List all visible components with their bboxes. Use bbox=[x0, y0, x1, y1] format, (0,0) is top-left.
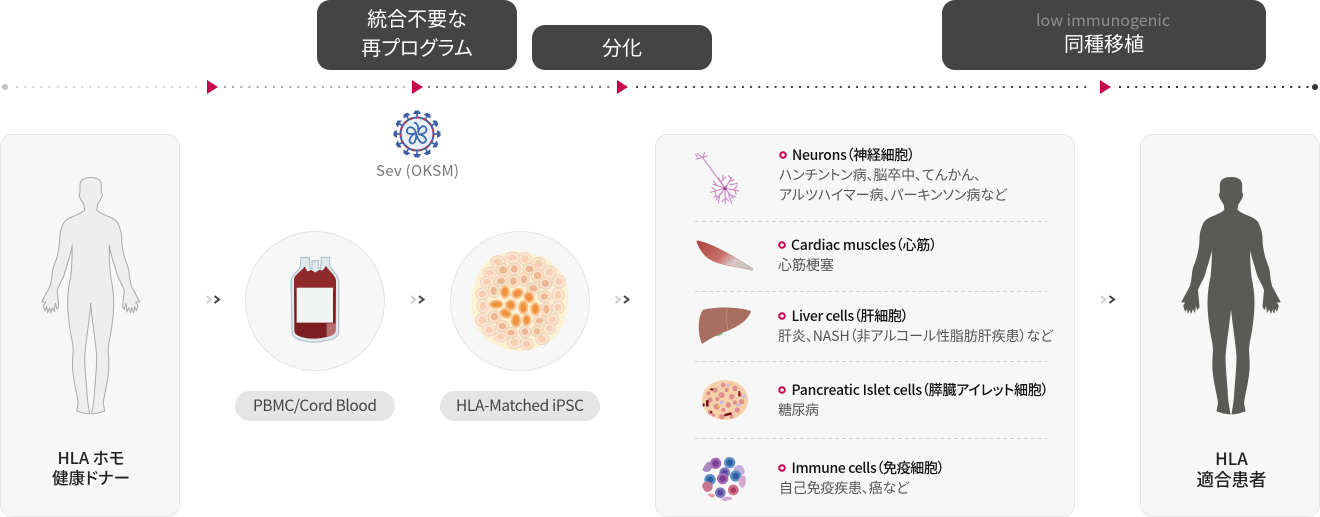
label: patient bbox=[1196, 445, 1266, 492]
box: reprogramming step: 統合不要な bbox=[367, 3, 467, 32]
bullet bbox=[780, 152, 786, 158]
icon: liver bbox=[699, 307, 751, 344]
box: allogeneic transplant step: 同種移植 bbox=[1064, 28, 1144, 57]
icon: patient body silhouette bbox=[1182, 178, 1280, 414]
box: reprogramming step: 再プログラム bbox=[361, 32, 473, 61]
text: neuron diseases: ハンチントン病、脳卒中、てんかん、 bbox=[779, 165, 981, 185]
icon: blood bag bbox=[291, 257, 339, 342]
arrow: cells to patient bbox=[1101, 296, 1114, 303]
label: patient: 適合患者 bbox=[1196, 467, 1266, 492]
bullet bbox=[779, 242, 785, 248]
icon: virus vector bbox=[394, 110, 440, 158]
arrow: blood to iPSC bbox=[411, 296, 424, 303]
bullet bbox=[779, 313, 785, 319]
row: cardiac muscles bbox=[697, 235, 937, 275]
pill: HLA-Matched iPSC bbox=[440, 391, 600, 421]
icon: muscle bbox=[697, 241, 753, 271]
arrow: donor to blood bbox=[206, 296, 219, 303]
circle: HLA-Matched iPSC bbox=[450, 232, 590, 370]
label: donor: HLA ホモ bbox=[57, 445, 125, 469]
text: neuron diseases: アルツハイマー病、パーキンソン病など bbox=[779, 185, 1008, 205]
box: differentiation step: 分化 bbox=[602, 32, 642, 61]
box: allogeneic transplant step: low immunogenic bbox=[1036, 7, 1170, 31]
row: immune cells bbox=[701, 457, 944, 501]
label: patient: HLA bbox=[1215, 445, 1248, 470]
timeline with arrow markers bbox=[2, 80, 1318, 94]
title: neurons: Neurons（神経細胞） bbox=[792, 145, 915, 165]
text: pancreatic diseases: 糖尿病 bbox=[778, 400, 819, 420]
title: liver: Liver cells（肝細胞） bbox=[792, 306, 908, 326]
title: immune: Immune cells（免疫細胞） bbox=[792, 458, 944, 478]
arrow: iPSC to cells bbox=[616, 296, 628, 303]
text: immune diseases: 自己免疫疾患、癌など bbox=[779, 478, 910, 498]
panel: donor bbox=[0, 134, 180, 516]
icon: neuron bbox=[695, 152, 739, 203]
pill: PBMC/Cord Blood bbox=[235, 391, 395, 421]
label: Sev (OKSM): Sev (OKSM) bbox=[376, 160, 459, 181]
row: pancreatic islet bbox=[702, 380, 1048, 420]
title: cardiac: Cardiac muscles（心筋） bbox=[791, 235, 937, 255]
label: donor bbox=[52, 445, 130, 489]
text: liver diseases: 肝炎、NASH（非アルコール性脂肪肝疾患）など bbox=[778, 326, 1054, 346]
bullet bbox=[779, 387, 785, 393]
label: donor: 健康ドナー bbox=[52, 465, 130, 489]
icon: iPSC colony bbox=[471, 251, 568, 351]
text: neuron diseases bbox=[779, 165, 1008, 205]
row: liver bbox=[699, 306, 1054, 346]
text: cardiac diseases: 心筋梗塞 bbox=[778, 255, 834, 275]
panel: patient bbox=[1140, 134, 1320, 516]
title: pancreatic: Pancreatic Islet cells（膵臓アイレット細胞） bbox=[792, 380, 1048, 400]
icon: immune cells bbox=[701, 457, 747, 501]
box: allogeneic transplant step bbox=[942, 0, 1266, 70]
bullet bbox=[779, 465, 785, 471]
pill: HLA-Matched iPSC: HLA-Matched iPSC bbox=[456, 394, 584, 416]
icon: donor body outline bbox=[42, 178, 140, 414]
box: reprogramming step bbox=[317, 0, 517, 70]
pill: PBMC/Cord Blood: PBMC/Cord Blood bbox=[253, 394, 377, 416]
icon: islet bbox=[702, 380, 748, 420]
row: neurons bbox=[695, 145, 1008, 205]
panel: differentiated cells bbox=[656, 134, 1074, 516]
box: differentiation step bbox=[532, 25, 712, 70]
circle: PBMC blood bag bbox=[246, 232, 384, 370]
